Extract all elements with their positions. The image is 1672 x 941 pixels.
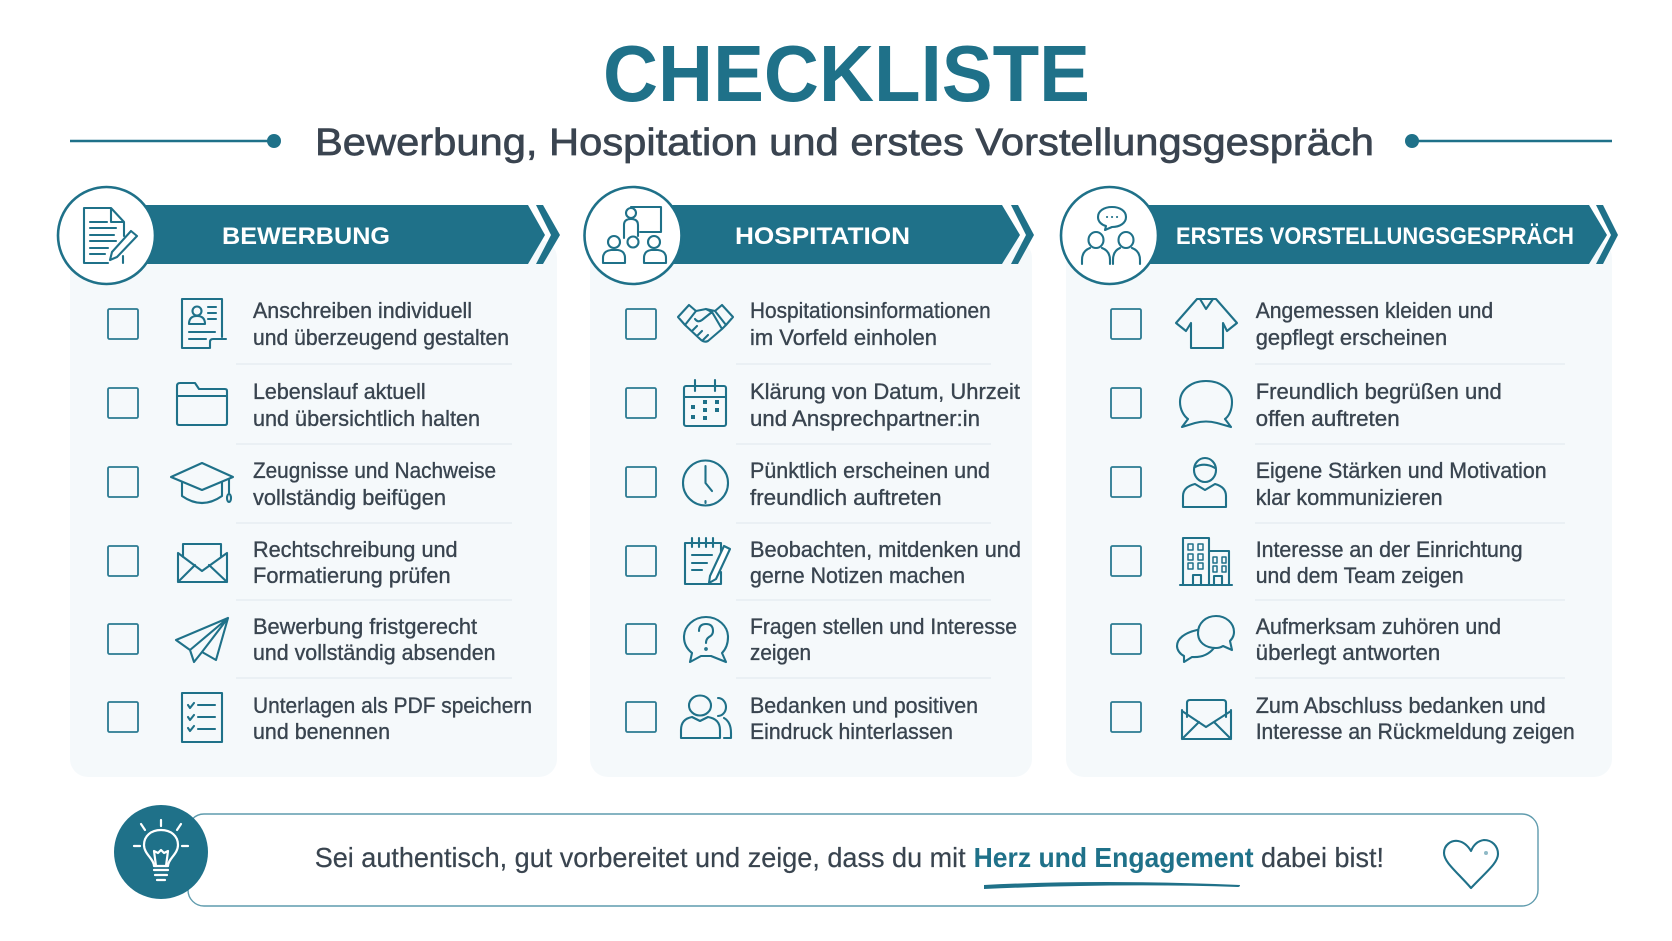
header banner — [650, 205, 1034, 264]
item text: gerne Notizen machen — [750, 563, 965, 588]
icon: question bubble — [684, 617, 728, 662]
item text: und übersichtlich halten — [253, 406, 480, 431]
item text — [1256, 537, 1523, 588]
item row 3 — [108, 458, 496, 510]
checkbox — [108, 467, 138, 497]
checkbox — [626, 309, 656, 339]
item row 5 — [1111, 614, 1501, 665]
heading: BEWERBUNG — [222, 223, 390, 250]
item row 1 — [108, 298, 509, 350]
item text — [253, 614, 496, 665]
item text: im Vorfeld einholen — [750, 325, 937, 350]
item row 6 — [626, 693, 978, 744]
title: CHECKLISTE — [603, 29, 1090, 118]
checkbox — [626, 467, 656, 497]
item text: Eindruck hinterlassen — [750, 719, 953, 744]
item row 4 — [626, 537, 1021, 588]
panel background — [590, 240, 1032, 777]
item text: Unterlagen als PDF speichern — [253, 693, 532, 718]
icon: light bulb — [114, 805, 208, 899]
item text — [750, 614, 1017, 665]
item text: Fragen stellen und Interesse — [750, 614, 1017, 639]
item row 2 — [626, 379, 1020, 431]
item row 4 — [1111, 537, 1523, 588]
item text: überlegt antworten — [1256, 640, 1440, 665]
checkbox — [1111, 546, 1141, 576]
item text — [1256, 298, 1493, 350]
item text: vollständig beifügen — [253, 485, 446, 510]
item text — [750, 693, 978, 744]
footer callout — [114, 805, 1538, 906]
header banner — [1130, 205, 1618, 264]
icon: buildings — [1180, 538, 1232, 585]
brush underline — [984, 882, 1240, 889]
item text: Lebenslauf aktuell — [253, 379, 426, 404]
heading: HOSPITATION — [735, 223, 910, 250]
item row 2 — [1111, 379, 1502, 431]
item text — [1256, 379, 1502, 431]
callout text: Sei authentisch, gut vorbereitet und zeige, dass du mit — [315, 842, 966, 873]
icon: envelope — [178, 544, 227, 582]
item text: und dem Team zeigen — [1256, 563, 1464, 588]
item text: Bedanken und positiven — [750, 693, 978, 718]
item text — [1256, 614, 1501, 665]
item text: Zeugnisse und Nachweise — [253, 458, 496, 483]
icon: shirt — [1176, 299, 1237, 348]
item row 2 — [108, 379, 480, 431]
item text — [1256, 693, 1575, 744]
callout text — [315, 842, 1384, 873]
item text: gepflegt erscheinen — [1256, 325, 1447, 350]
icon: handshake — [678, 305, 733, 342]
checkbox — [626, 702, 656, 732]
icon: people — [681, 696, 731, 738]
heading: ERSTES VORSTELLUNGSGESPRÄCH — [1176, 223, 1574, 250]
item text — [253, 379, 480, 431]
item row 6 — [1111, 693, 1575, 744]
item row 5 — [626, 614, 1017, 665]
icon: checklist — [182, 693, 222, 742]
checkbox — [1111, 702, 1141, 732]
checkbox — [108, 388, 138, 418]
item text: freundlich auftreten — [750, 485, 942, 510]
checkbox — [1111, 309, 1141, 339]
checkbox — [1111, 388, 1141, 418]
item text: Klärung von Datum, Uhrzeit — [750, 379, 1020, 404]
subtitle: Bewerbung, Hospitation und erstes Vorstellungsgespräch — [315, 122, 1374, 164]
panel: Bewerbung — [58, 187, 560, 777]
item text: und benennen — [253, 719, 390, 744]
item text — [253, 458, 496, 510]
icon: envelope — [1182, 700, 1231, 739]
checkbox — [626, 546, 656, 576]
item row 5 — [108, 614, 496, 665]
item text — [750, 379, 1020, 431]
item text — [750, 537, 1021, 588]
callout box — [188, 814, 1538, 906]
item row 4 — [108, 537, 458, 588]
checkbox — [108, 546, 138, 576]
right title rule — [1405, 134, 1612, 148]
item text: Anschreiben individuell — [253, 298, 472, 323]
item text — [750, 298, 991, 350]
panel background — [1066, 240, 1612, 777]
icon: person — [1183, 458, 1226, 507]
item text — [253, 537, 458, 588]
item text: Aufmerksam zuhören und — [1256, 614, 1501, 639]
item text: zeigen — [750, 640, 811, 665]
checkbox — [108, 702, 138, 732]
checkbox — [108, 309, 138, 339]
item row 3 — [1111, 458, 1547, 510]
header banner — [125, 205, 560, 264]
header icon: document and pencil — [58, 187, 155, 284]
panel: Hospitation — [584, 187, 1034, 777]
checkbox — [626, 624, 656, 654]
checkbox — [626, 388, 656, 418]
icon: application letter — [182, 299, 226, 348]
panel background — [70, 240, 557, 777]
item row 1 — [626, 298, 991, 350]
icon: two speech bubbles — [1177, 616, 1234, 662]
header icon: conversation group — [1061, 187, 1158, 284]
item text: Rechtschreibung und — [253, 537, 458, 562]
item text: Interesse an der Einrichtung — [1256, 537, 1523, 562]
left title rule — [70, 134, 281, 148]
item text: Eigene Stärken und Motivation — [1256, 458, 1547, 483]
item text: Pünktlich erscheinen und — [750, 458, 990, 483]
checkbox — [108, 624, 138, 654]
item text: klar kommunizieren — [1256, 485, 1443, 510]
item text — [1256, 458, 1547, 510]
item text — [253, 298, 509, 350]
checkbox — [1111, 467, 1141, 497]
item row 6 — [108, 693, 532, 744]
callout text: Herz und Engagement — [974, 842, 1254, 873]
item text: Formatierung prüfen — [253, 563, 451, 588]
callout text: dabei bist! — [1261, 842, 1384, 873]
item text: Beobachten, mitdenken und — [750, 537, 1021, 562]
header icon: presenter and audience — [584, 187, 682, 284]
icon: paper plane — [176, 618, 228, 662]
icon: clock — [683, 460, 728, 506]
item row 3 — [626, 458, 990, 510]
item text — [253, 693, 532, 744]
icon: heart — [1444, 840, 1498, 888]
item text: Freundlich begrüßen und — [1256, 379, 1502, 404]
icon: speech bubble — [1180, 381, 1232, 427]
item text: Hospitationsinformationen — [750, 298, 991, 323]
item text: offen auftreten — [1256, 406, 1400, 431]
icon: notepad and pencil — [685, 538, 730, 584]
item text: Zum Abschluss bedanken und — [1256, 693, 1546, 718]
icon: folder — [177, 383, 227, 425]
item text: und überzeugend gestalten — [253, 325, 509, 350]
icon: graduation cap — [171, 463, 233, 503]
icon: calendar — [684, 380, 726, 426]
item text: Interesse an Rückmeldung zeigen — [1256, 719, 1575, 744]
checkbox — [1111, 624, 1141, 654]
item text: Bewerbung fristgerecht — [253, 614, 477, 639]
item text — [750, 458, 990, 510]
item text: Angemessen kleiden und — [1256, 298, 1493, 323]
item row 1 — [1111, 298, 1493, 350]
item text: und vollständig absenden — [253, 640, 496, 665]
panel: Erstes Vorstellungsgespräch — [1061, 187, 1618, 777]
item text: und Ansprechpartner:in — [750, 406, 980, 431]
